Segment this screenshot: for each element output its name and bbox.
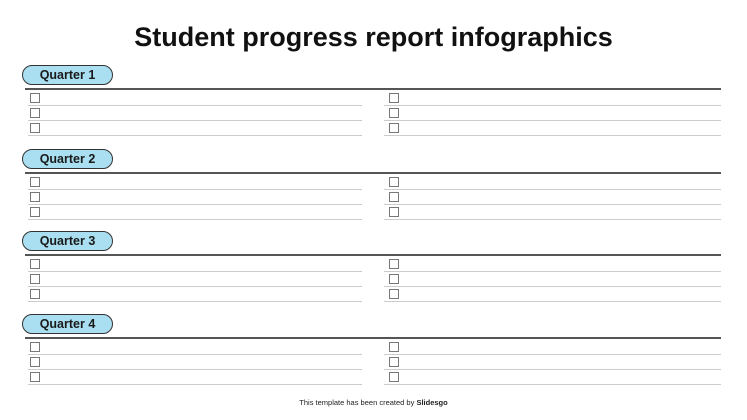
checklist right bbox=[384, 259, 721, 302]
section: quarter 4 bbox=[22, 314, 721, 385]
title: Student progress report infographics bbox=[134, 22, 613, 52]
label: quarter 1 bbox=[22, 65, 113, 85]
checklist left bbox=[28, 93, 362, 136]
checklist left bbox=[28, 259, 362, 302]
label: quarter 3 bbox=[22, 231, 113, 251]
footer credit: This template has been created by Slidesgo bbox=[299, 398, 448, 407]
checklist right bbox=[384, 93, 721, 136]
section: quarter 1 bbox=[22, 65, 721, 136]
checklist right bbox=[384, 177, 721, 220]
label: quarter 2 bbox=[22, 149, 113, 169]
checklist left bbox=[28, 342, 362, 385]
checklist right bbox=[384, 342, 721, 385]
label: quarter 2: Quarter 2 bbox=[40, 152, 95, 166]
label: quarter 4: Quarter 4 bbox=[40, 317, 95, 331]
label: quarter 3: Quarter 3 bbox=[40, 234, 95, 248]
section: quarter 2 bbox=[22, 149, 721, 220]
section: quarter 3 bbox=[22, 231, 721, 302]
label: quarter 1: Quarter 1 bbox=[40, 68, 95, 82]
checklist left bbox=[28, 177, 362, 220]
label: quarter 4 bbox=[22, 314, 113, 334]
